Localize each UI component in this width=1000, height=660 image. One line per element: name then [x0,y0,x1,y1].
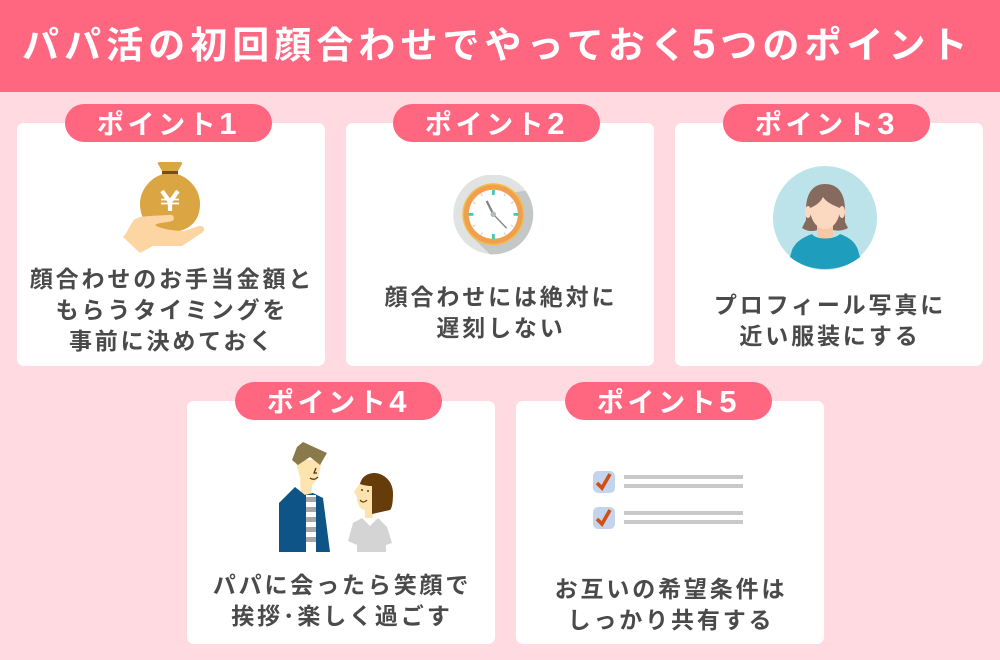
badge: point 4: ポイント4 [267,384,410,419]
text: point 4 [213,572,471,629]
icon: money bag on hand [123,162,204,253]
icon: checklist [593,471,743,529]
badge: point 3: ポイント3 [755,106,898,141]
badge: point 2 [393,104,600,142]
text: point 1: 顔合わせのお手当金額と [30,266,314,292]
panel: point 3 [675,104,983,366]
text: point 1 [30,266,314,354]
badge: point 1: ポイント1 [97,106,240,141]
panel: point 4 [187,382,495,644]
text: point 5 [555,576,787,633]
text: point 1: 事前に決めておく [69,328,275,354]
badge: point 3 [723,104,930,142]
text: point 4: 挨拶･楽しく過ごす [231,603,453,629]
text: point 1: もらうタイミングを [56,297,288,323]
text: point 4: パパに会ったら笑顔で [213,572,471,598]
panel: point 1 [17,104,325,366]
text: point 2: 顔合わせには絶対に [385,284,617,310]
icon: woman portrait [773,166,877,270]
text: point 5: お互いの希望条件は [555,576,787,602]
text: point 3: 近い服装にする [739,323,921,349]
panel: point 5 [516,382,824,644]
icon: clock [453,175,534,254]
panel: point 2 [346,104,654,366]
badge: point 5 [565,382,772,420]
text: point 2: 遅刻しない [436,315,566,341]
text: point 3 [714,292,946,349]
text: point 2 [385,284,617,341]
header band [0,0,1000,92]
badge: point 1 [65,104,272,142]
icon: couple talking [279,442,393,552]
text: point 3: プロフィール写真に [714,292,946,318]
badge: point 4 [235,382,442,420]
title: パパ活の初回顔合わせでやっておく5つのポイント [22,20,973,67]
text: point 5: しっかり共有する [568,607,774,633]
badge: point 2: ポイント2 [425,106,568,141]
badge: point 5: ポイント5 [597,384,740,419]
